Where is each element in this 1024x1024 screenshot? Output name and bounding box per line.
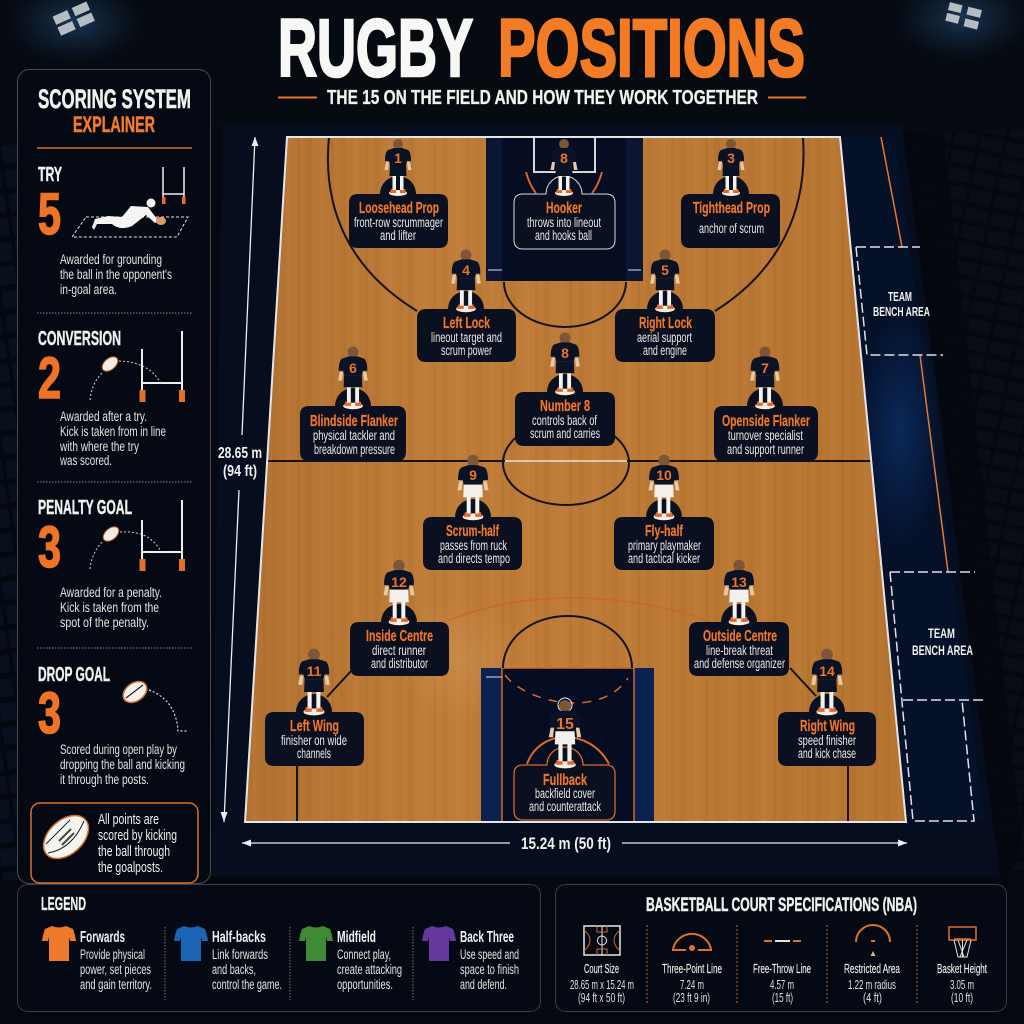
legend: back three: Use speed and [460, 947, 519, 962]
position: Right Wing: Right Wing [800, 718, 855, 735]
position: Right Lock [615, 250, 715, 362]
dimension: court width [242, 834, 907, 853]
position: Inside Centre [350, 560, 449, 676]
scoring: drop goal: Scored during open play by [60, 742, 177, 757]
panel heading [37, 84, 192, 148]
position: Hooker: 8 [560, 150, 568, 166]
position: Tighthead Prop [681, 139, 780, 248]
position: Right Lock: and engine [643, 343, 687, 358]
position: Outside Centre: line-break threat [706, 643, 773, 658]
panel heading: SCORING SYSTEM [38, 84, 191, 114]
spec: restricted area: Restricted Area [844, 962, 900, 976]
callout: all points: the goalposts. [98, 860, 163, 876]
icon: conversion kick [90, 331, 185, 402]
bottom key [477, 616, 658, 822]
three-point arc top [328, 137, 804, 311]
scoring: penalty goal: PENALTY GOAL [38, 497, 132, 519]
scoring: drop goal: it through the posts. [60, 772, 149, 787]
spec: restricted area: 1.22 m radius [848, 978, 896, 992]
position: Right Wing [778, 649, 876, 766]
position: Loosehead Prop: and lifter [380, 228, 416, 243]
callout: all points [31, 803, 198, 883]
position: Scrum-half: and directs tempo [438, 551, 510, 566]
position: Inside Centre: Inside Centre [366, 628, 433, 645]
position: Hooker: Hooker [546, 200, 582, 217]
position: Inside Centre: 12 [391, 574, 407, 590]
position: Loosehead Prop [349, 139, 448, 248]
position: Scrum-half [423, 455, 522, 570]
position: Right Wing: 14 [819, 663, 835, 679]
position: Left Wing: Left Wing [290, 718, 339, 735]
position: Number 8: Number 8 [540, 398, 590, 415]
position: Openside Flanker: and support runner [727, 442, 804, 457]
position: Inside Centre: and distributor [371, 656, 428, 671]
position: Right Wing: speed finisher [798, 733, 856, 748]
legend: half-backs: Half-backs [212, 929, 266, 946]
spec: court size: Court Size [584, 962, 619, 976]
halfway line and circle [262, 460, 880, 462]
icon: rugby ball [35, 807, 97, 867]
spec: three-point line: (23 ft 9 in) [673, 991, 710, 1005]
spec: free-throw line: (15 ft) [772, 991, 793, 1005]
position: Outside Centre [689, 560, 789, 676]
position: Blindside Flanker [300, 346, 406, 461]
spec: court size [570, 926, 634, 1005]
legend: half-backs: Link forwards [212, 947, 268, 962]
position: Number 8 [515, 332, 615, 446]
position: Left Wing: finisher on wide [281, 733, 347, 748]
spec: free-throw line [753, 941, 811, 1005]
position: Openside Flanker: turnover specialist [728, 428, 803, 443]
spec: basket height: 3.05 m [950, 978, 974, 992]
legend: back three [422, 926, 519, 992]
legend: midfield: create attacking [337, 962, 402, 977]
position: Outside Centre: 13 [731, 574, 747, 590]
scoring: conversion: was scored. [59, 453, 112, 468]
position: Number 8: controls back of [532, 413, 597, 428]
panel: legend: LEGEND [41, 894, 86, 914]
position: Outside Centre: Outside Centre [703, 628, 777, 645]
position: Blindside Flanker: physical tackler and [313, 428, 395, 443]
position: Fullback: backfield cover [535, 786, 595, 801]
scoring: conversion: Awarded after a try. [60, 409, 147, 424]
icon: try grounding [72, 167, 188, 237]
bench markings [856, 137, 983, 821]
legend: midfield [299, 926, 402, 992]
position: Blindside Flanker: breakdown pressure [314, 442, 395, 457]
legend: half-backs: control the game. [212, 977, 282, 992]
spec: three-point line [662, 934, 722, 1005]
scoring: try: TRY [38, 164, 62, 186]
top key [486, 137, 643, 327]
spec: three-point line: 7.24 m [680, 978, 704, 992]
basketball court floor [240, 130, 920, 830]
spec: court size: 28.65 m x 15.24 m [570, 978, 634, 992]
icon: free-throw line [764, 940, 801, 942]
legend: half-backs: and backs, [212, 962, 256, 977]
legend: half-backs [174, 926, 282, 992]
position: Tighthead Prop: anchor of scrum [699, 221, 764, 236]
scoring: try: 5 [38, 182, 61, 247]
position: Fly-half: and tactical kicker [628, 551, 700, 566]
scoring: drop goal [38, 664, 188, 787]
scoring: drop goal: 3 [38, 681, 61, 746]
panel: basketball court specifications [556, 884, 1006, 1012]
spec: basket height: Basket Height [937, 962, 987, 976]
position: Fly-half [614, 455, 714, 570]
spec: free-throw line: 4.57 m [770, 978, 794, 992]
position: Tighthead Prop: Tighthead Prop [693, 200, 770, 217]
spec: three-point line: Three-Point Line [662, 962, 722, 976]
position: Left Lock [417, 250, 516, 362]
position: Left Lock: scrum power [441, 343, 492, 358]
position: Left Wing [265, 649, 364, 766]
position: Blindside Flanker: Blindside Flanker [310, 413, 398, 430]
position: Inside Centre: direct runner [372, 643, 426, 658]
scoring: conversion [38, 328, 185, 468]
scoring: penalty goal: Awarded for a penalty. [60, 585, 162, 600]
position: Scrum-half: passes from ruck [440, 538, 507, 553]
bench markings: TEAM [928, 625, 955, 641]
icon: penalty kick [90, 500, 185, 571]
legend: forwards: Forwards [80, 929, 125, 946]
position: Right Lock: Right Lock [639, 315, 692, 332]
position: Hooker: throws into lineout [527, 215, 601, 230]
dimension: court length [218, 137, 262, 822]
position: Left Lock: lineout target and [431, 330, 502, 345]
position: Openside Flanker: Openside Flanker [722, 413, 810, 430]
spec: restricted area: (4 ft) [863, 991, 882, 1005]
dimension: court length: 28.65 m [218, 445, 262, 462]
spec: basket height: (10 ft) [951, 991, 973, 1005]
position: Scrum-half: 9 [469, 467, 477, 483]
position: Openside Flanker [714, 346, 818, 461]
spec: free-throw line: Free-Throw Line [753, 962, 811, 976]
position: Left Wing: channels [297, 746, 331, 761]
position: Fly-half: Fly-half [645, 523, 684, 540]
legend: forwards: Provide physical [80, 947, 145, 962]
spec: basket height [937, 927, 987, 1005]
subtitle: THE 15 ON THE FIELD AND HOW THEY WORK TOGETHER [327, 87, 758, 109]
icon: basket [949, 927, 976, 957]
callout: all points: scored by kicking [98, 828, 177, 844]
legend: midfield: Midfield [337, 929, 376, 946]
icon: restricted arc [856, 925, 890, 956]
position: Fullback [514, 698, 615, 820]
position: Left Wing: 11 [307, 663, 322, 679]
legend: midfield: opportunities. [337, 977, 393, 992]
position: Tighthead Prop: 3 [727, 150, 735, 166]
panel: scoring system explainer [18, 70, 210, 884]
legend: forwards: and gain territory. [80, 977, 152, 992]
position: Loosehead Prop: Loosehead Prop [359, 200, 439, 217]
title: RUGBY [278, 3, 473, 94]
position: Fullback: 15 [556, 716, 574, 733]
position: Openside Flanker: 7 [761, 360, 769, 376]
scoring: conversion: 2 [38, 346, 61, 411]
title [278, 3, 805, 94]
dimension: court width: 15.24 m (50 ft) [521, 834, 611, 853]
position: Hooker: and hooks ball [535, 228, 592, 243]
bench markings: TEAM [888, 289, 912, 304]
scoring: penalty goal: 3 [38, 515, 61, 580]
legend: back three: and defend. [460, 977, 507, 992]
scoring: try [38, 164, 188, 297]
callout: all points: the ball through [98, 844, 170, 860]
scoring: conversion: with where the try [59, 439, 139, 454]
bench markings: BENCH AREA [873, 304, 930, 319]
position: Right Lock: aerial support [637, 330, 692, 345]
position: Hooker [514, 139, 615, 249]
spec: restricted area [844, 925, 900, 1005]
legend: back three: Back Three [460, 929, 514, 946]
scoring: penalty goal: spot of the penalty. [60, 615, 149, 630]
icon: drop goal ball [119, 677, 188, 731]
position: Number 8: scrum and carries [530, 426, 600, 441]
position: Left Lock: 4 [462, 262, 470, 278]
scoring: penalty goal: Kick is taken from the [60, 600, 159, 615]
icon: court [584, 926, 620, 955]
scoring: penalty goal [38, 497, 185, 630]
legend: forwards: power, set pieces [80, 962, 151, 977]
callout: all points: All points are [98, 812, 159, 828]
scoring: drop goal: dropping the ball and kicking [60, 757, 185, 772]
spec: court size: (94 ft x 50 ft) [578, 991, 625, 1005]
scoring: try: Awarded for grounding [60, 252, 162, 267]
scoring: conversion: Kick is taken from in line [60, 424, 166, 439]
position: Blindside Flanker: 6 [349, 360, 357, 376]
title: POSITIONS [498, 3, 805, 94]
legend: midfield: Connect play, [337, 947, 391, 962]
position: Scrum-half: Scrum-half [446, 523, 500, 540]
legend: forwards [42, 926, 152, 992]
panel: legend [18, 884, 540, 1012]
icon: three-point arc [672, 934, 712, 950]
dimension: court length: (94 ft) [223, 463, 257, 480]
scoring: drop goal: DROP GOAL [38, 664, 110, 686]
position: Outside Centre: and defense organizer [694, 656, 785, 671]
legend: back three: space to finish [460, 962, 519, 977]
scoring: try: the ball in the opponent's [60, 267, 172, 282]
panel heading: EXPLAINER [73, 112, 155, 137]
bench markings: BENCH AREA [912, 642, 973, 658]
position: Right Lock: 5 [661, 262, 669, 278]
position: Fullback: Fullback [543, 772, 587, 789]
position: Left Lock: Left Lock [443, 315, 490, 332]
court surround floor [212, 124, 1000, 876]
position: Fullback: and counterattack [529, 799, 601, 814]
position: Fly-half: primary playmaker [628, 538, 701, 553]
position: Fly-half: 10 [656, 467, 672, 483]
scoring: try: in-goal area. [60, 282, 117, 297]
position: Right Wing: and kick chase [798, 746, 856, 761]
position: Loosehead Prop: front-row scrummager [354, 215, 443, 230]
position: Loosehead Prop: 1 [394, 150, 402, 166]
position: Number 8: 8 [561, 345, 569, 361]
scoring: conversion: CONVERSION [38, 328, 121, 350]
